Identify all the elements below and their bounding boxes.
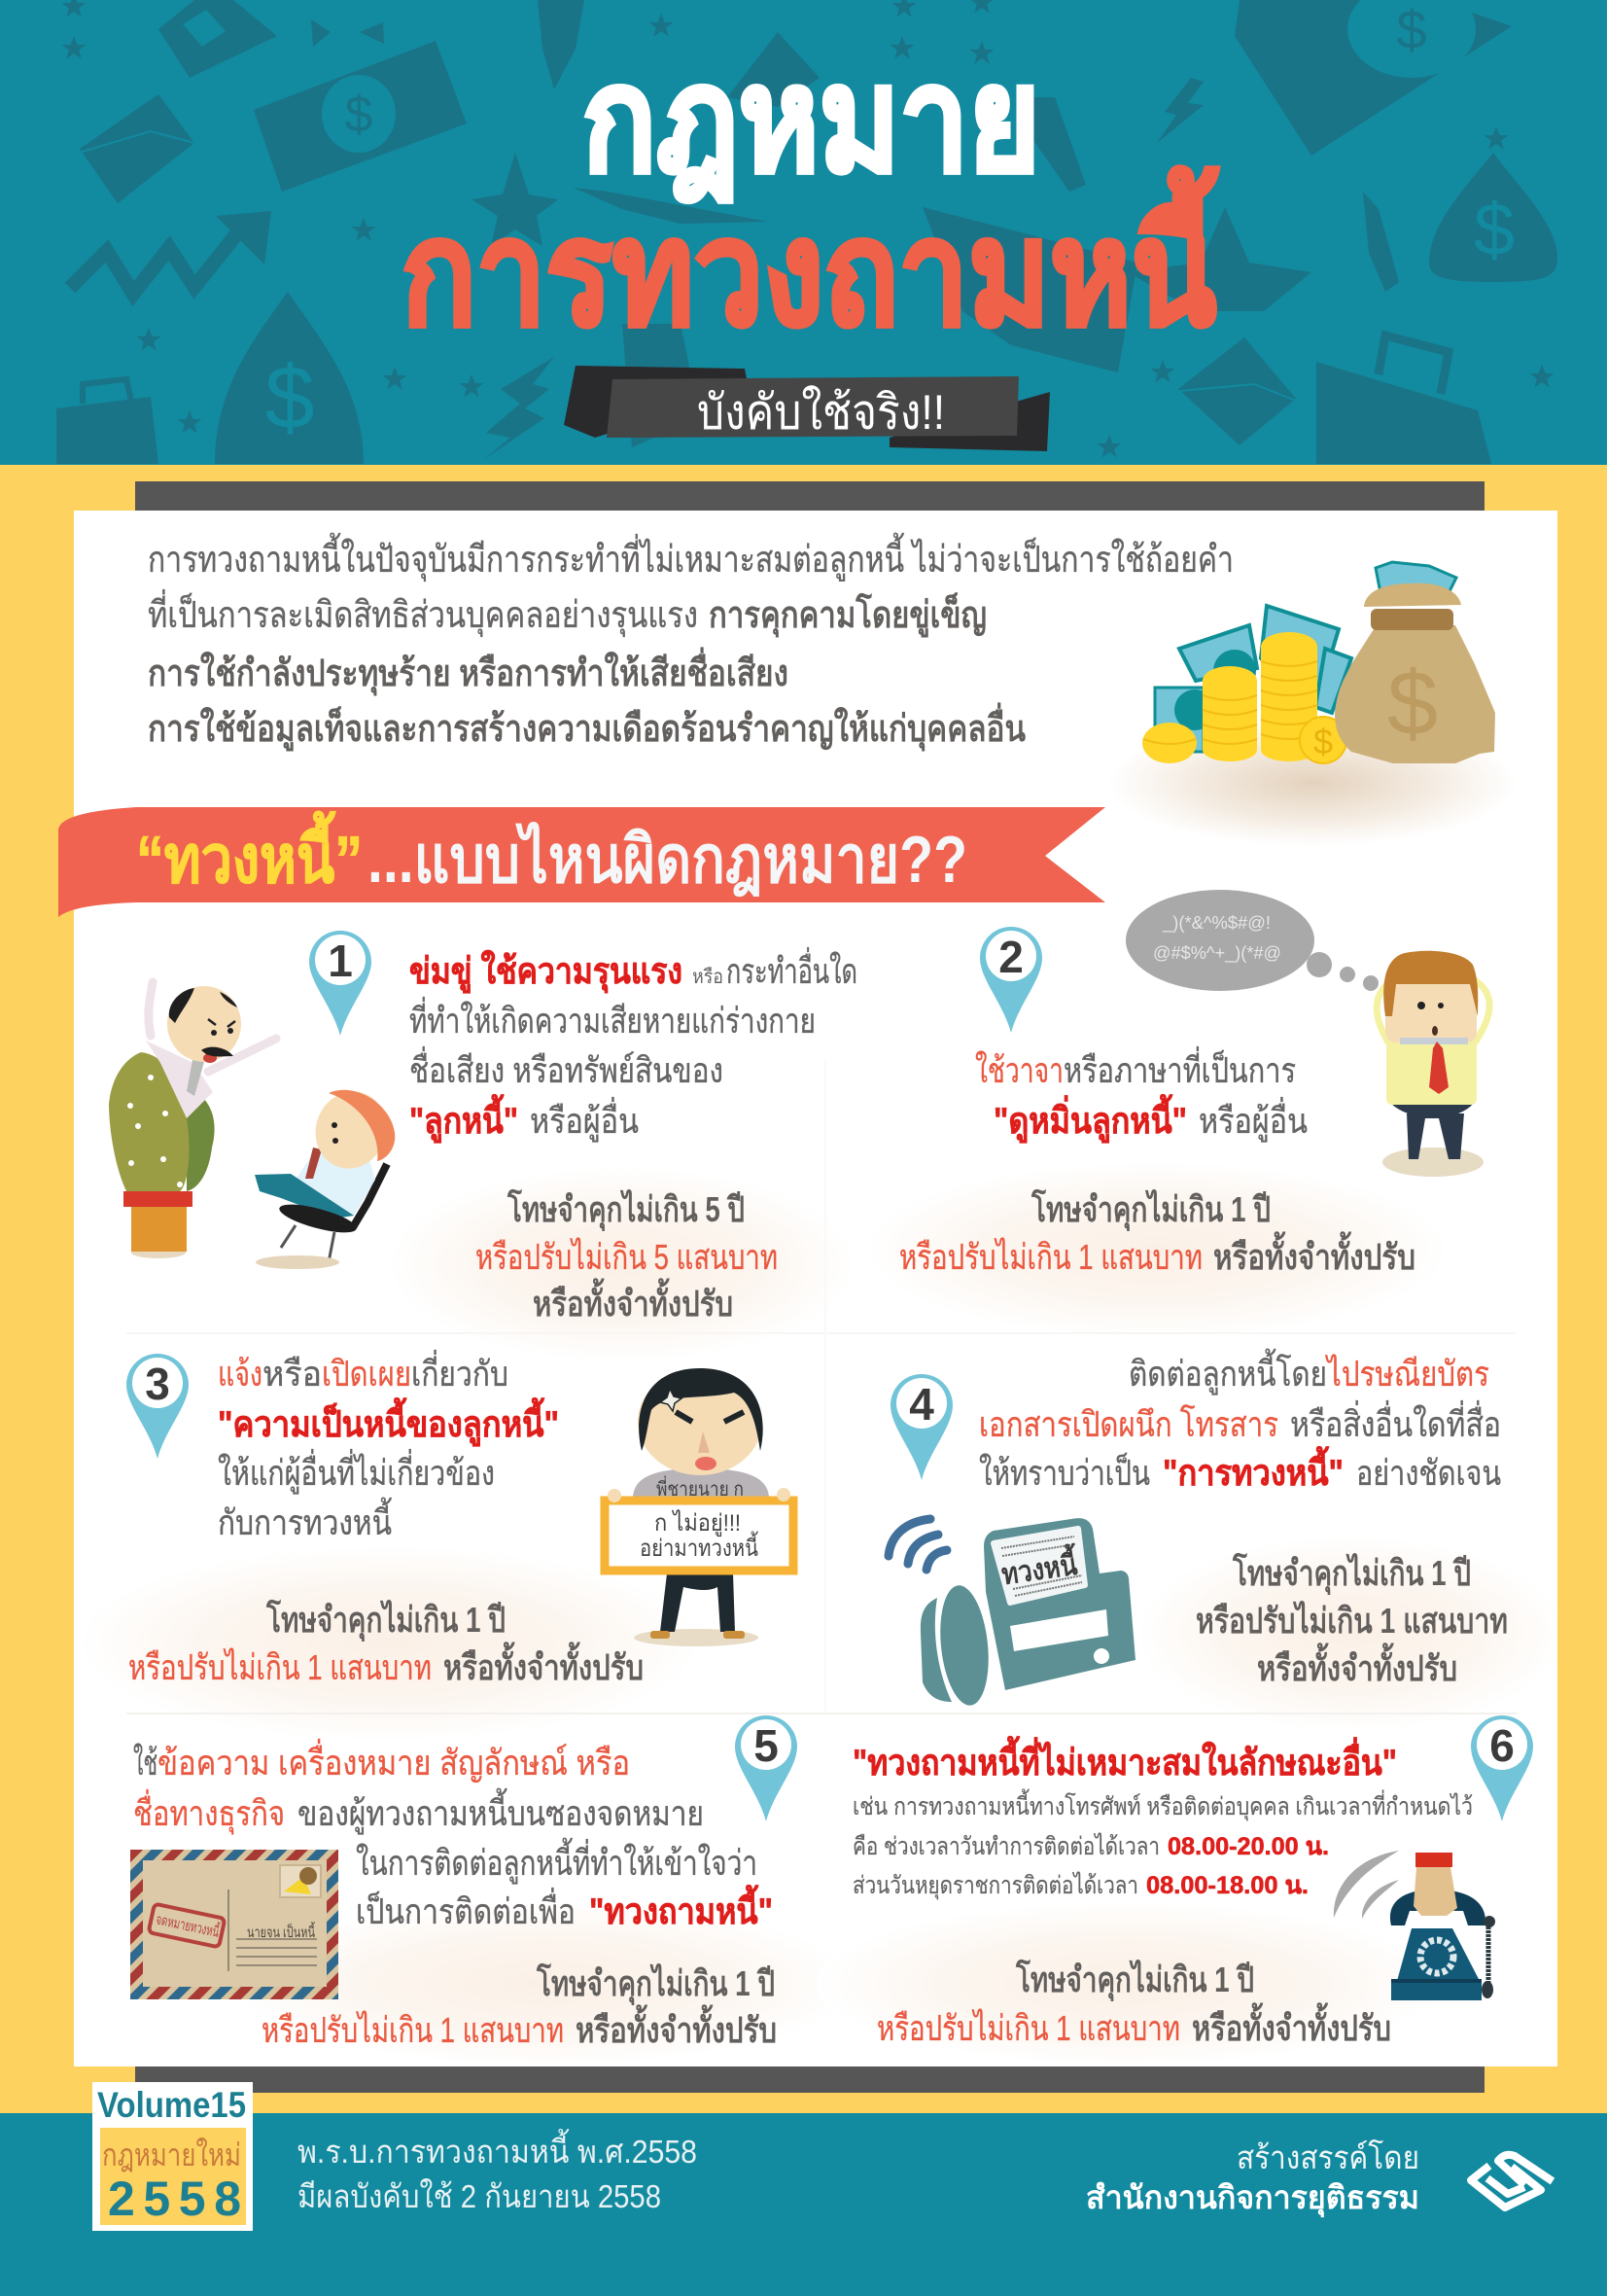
item 1 <box>109 931 857 1324</box>
pin 2 <box>980 927 1042 1033</box>
text 4: ติดต่อลูกหนี้โดย <box>1129 1348 1327 1395</box>
text 2: ใช้วาจา <box>975 1050 1064 1090</box>
text 6: คือ ช่วงเวลาวันทำการติดต่อได้เวลา <box>853 1832 1160 1860</box>
illustration: angry man with sign <box>605 1368 793 1646</box>
text 6: ส่วนวันหยุดราชการติดต่อได้เวลา <box>853 1871 1138 1900</box>
text 1: หรือ <box>692 967 723 988</box>
pin 1 <box>309 931 371 1036</box>
text 3: แจ้ง <box>218 1354 262 1394</box>
pin 3 <box>126 1354 189 1459</box>
red ribbon heading: “ทวงหนี้” <box>136 810 363 897</box>
text 4: ให้ทราบว่าเป็น <box>979 1451 1150 1493</box>
text 4 <box>979 1348 1501 1493</box>
background pattern icons: $ <box>1474 189 1515 271</box>
text 1: ที่ทำให้เกิดความเสียหายแก่ร่างกาย <box>409 997 816 1041</box>
penalty 2: หรือทั้งจำทั้งปรับ <box>1213 1231 1415 1277</box>
credit: สำนักงานกิจการยุติธรรม <box>1086 2179 1419 2218</box>
text 3: เปิดเผย <box>322 1354 411 1394</box>
item 3 <box>126 1350 793 1687</box>
pin 1: 1 <box>328 936 353 986</box>
law reference: พ.ร.บ.การทวงถามหนี้ พ.ศ.2558 <box>297 2129 697 2170</box>
penalty 5 <box>262 1962 777 2050</box>
icon: money bag with coins <box>1142 562 1495 763</box>
text 5: "ทวงถามหนี้" <box>589 1885 773 1931</box>
volume badge: Volume15 <box>97 2085 246 2125</box>
text 1: "ลูกหนี้" <box>409 1094 518 1144</box>
pin 5 <box>735 1715 797 1821</box>
icon: envelope: จดหมายทวงหนี้ <box>155 1909 222 1941</box>
background pattern icons: $ <box>345 87 373 143</box>
pin 4: 4 <box>909 1379 934 1430</box>
penalty 4 <box>1196 1552 1508 1688</box>
text 1 <box>409 947 857 1144</box>
icon: envelope <box>130 1850 338 1999</box>
text 5: ชื่อทางธุรกิจ <box>133 1789 285 1835</box>
penalty 3 <box>128 1599 644 1687</box>
volume badge: กฎหมายใหม่ <box>102 2137 241 2172</box>
pin 6 <box>1471 1715 1533 1821</box>
item 2 <box>899 890 1489 1277</box>
intro text: การทวงถามหนี้ในปัจจุบันมีการกระทำที่ไม่เหมาะสมต่อลูกหนี้ ไม่ว่าจะเป็นการใช้ถ้อยคำ <box>148 532 1234 582</box>
icon: money bag with coins: $ <box>1313 722 1333 761</box>
text 1: หรือผู้อื่น <box>530 1097 639 1143</box>
main white panel <box>58 511 1565 2066</box>
text 2: หรือภาษาที่เป็นการ <box>1064 1046 1296 1090</box>
page background: yellow <box>0 465 1607 2118</box>
law reference <box>297 2129 697 2214</box>
header band <box>0 0 1607 465</box>
credit: สร้างสรรค์โดย <box>1237 2139 1419 2175</box>
text 3: เกี่ยวกับ <box>411 1350 508 1394</box>
penalty 2: หรือปรับไม่เกิน 1 แสนบาท <box>899 1237 1203 1277</box>
illustration: angry man with sign: อย่ามาทวงหนี้ <box>640 1531 758 1562</box>
intro text: การคุกคามโดยขู่เข็ญ <box>709 592 987 638</box>
speech bubble: @#$%^+_)(*#@ <box>1153 943 1281 964</box>
text 6: 08.00-18.00 น. <box>1146 1872 1309 1899</box>
text 1: กระทำอื่นใด <box>726 947 857 991</box>
penalty 6: หรือปรับไม่เกิน 1 แสนบาท <box>877 2008 1180 2048</box>
text 5: ข้อความ เครื่องหมาย สัญลักษณ์ หรือ <box>157 1739 630 1783</box>
volume badge: 2558 <box>108 2172 241 2226</box>
text 1: ข่มขู่ ใช้ความรุนแรง <box>409 949 682 994</box>
ribbon: enforced: บังคับใช้จริง!! <box>697 385 945 440</box>
text 4: ไปรษณียบัตร <box>1325 1354 1489 1394</box>
illustration: upset man <box>1377 951 1489 1177</box>
pin 4 <box>891 1374 953 1480</box>
penalty 4: หรือทั้งจำทั้งปรับ <box>1257 1643 1457 1688</box>
text 3 <box>218 1350 559 1542</box>
text 5: เป็นการติดต่อเพื่อ <box>356 1888 576 1931</box>
text 6: เช่น การทวงถามหนี้ทางโทรศัพท์ หรือติดต่อบุคคล เกินเวลาที่กำหนดไว้ <box>853 1788 1473 1821</box>
text 5: ใช้ <box>133 1743 157 1783</box>
intro text <box>148 532 1234 752</box>
text 4: หรือสิ่งอื่นใดที่สื่อ <box>1290 1400 1501 1444</box>
pin 3: 3 <box>145 1359 170 1409</box>
penalty 2 <box>899 1188 1415 1277</box>
penalty 6 <box>877 1959 1391 2048</box>
text 2: "ดูหมิ่นลูกหนี้" <box>994 1094 1187 1144</box>
icon: fax machine <box>889 1518 1135 1708</box>
text 5: ของผู้ทวงถามหนี้บนซองจดหมาย <box>297 1787 704 1835</box>
penalty 3: โทษจำคุกไม่เกิน 1 ปี <box>265 1599 506 1643</box>
penalty 3: หรือปรับไม่เกิน 1 แสนบาท <box>128 1647 432 1687</box>
item 5 <box>130 1715 797 2050</box>
text 6: 08.00-20.00 น. <box>1168 1833 1329 1860</box>
title: debt collection: การทวงถามหนี้ <box>402 166 1218 355</box>
penalty 6: หรือทั้งจำทั้งปรับ <box>1192 2002 1391 2048</box>
icon: telephone <box>1334 1851 1495 2000</box>
intro text: การใช้ข้อมูลเท็จและการสร้างความเดือดร้อนรำคาญให้แก่บุคคลอื่น <box>148 702 1026 752</box>
text 4: เอกสารเปิดผนึก โทรสาร <box>979 1404 1278 1444</box>
icon: logo <box>1471 2155 1553 2208</box>
volume badge <box>92 2082 253 2231</box>
credit <box>1086 2139 1419 2218</box>
penalty 5: โทษจำคุกไม่เกิน 1 ปี <box>536 1962 775 2006</box>
background pattern icons <box>56 0 1557 464</box>
intro text: การใช้กำลังประทุษร้าย หรือการทำให้เสียชื่อเสียง <box>148 647 788 696</box>
text 6: "ทวงถามหนี้ที่ไม่เหมาะสมในลักษณะอื่น" <box>853 1736 1397 1783</box>
ribbon: enforced <box>564 366 1050 451</box>
text 2: หรือผู้อื่น <box>1199 1097 1308 1143</box>
text 3: "ความเป็นหนี้ของลูกหนี้" <box>218 1397 559 1447</box>
background pattern icons: $ <box>1396 0 1427 60</box>
penalty 4: หรือปรับไม่เกิน 1 แสนบาท <box>1196 1600 1508 1641</box>
background pattern icons: $ <box>264 348 315 447</box>
penalty 4: โทษจำคุกไม่เกิน 1 ปี <box>1232 1552 1471 1596</box>
penalty 5: หรือทั้งจำทั้งปรับ <box>576 2004 777 2050</box>
penalty 5: หรือปรับไม่เกิน 1 แสนบาท <box>262 2010 564 2050</box>
penalty 1 <box>475 1188 778 1324</box>
penalty 1: โทษจำคุกไม่เกิน 5 ปี <box>507 1188 745 1232</box>
footer band <box>0 2082 1607 2296</box>
illustration: angry boss and debtor <box>109 982 398 1269</box>
penalty 1: หรือปรับไม่เกิน 5 แสนบาท <box>475 1237 778 1277</box>
penalty 6: โทษจำคุกไม่เกิน 1 ปี <box>1015 1959 1254 2002</box>
icon: envelope: นายจน เป็นหนี้ <box>247 1922 315 1941</box>
item 4 <box>889 1348 1508 1708</box>
small stars <box>62 0 1554 457</box>
text 5 <box>133 1739 773 1931</box>
text 4: "การทวงหนี้" <box>1163 1446 1344 1493</box>
title: law: กฎหมาย <box>582 38 1040 202</box>
item 6 <box>853 1715 1533 2048</box>
red ribbon heading: ...แบบไหนผิดกฎหมาย?? <box>367 821 967 897</box>
law reference: มีผลบังคับใช้ 2 กันยายน 2558 <box>297 2178 661 2214</box>
penalty 3: หรือทั้งจำทั้งปรับ <box>443 1642 644 1687</box>
speech bubble <box>1126 890 1379 991</box>
text 1: ชื่อเสียง หรือทรัพย์สินของ <box>409 1046 723 1090</box>
text 3: กับการทวงหนี้ <box>218 1497 393 1542</box>
text 5: ในการติดต่อลูกหนี้ที่ทำให้เข้าใจว่า <box>356 1837 757 1885</box>
intro text: ที่เป็นการละเมิดสิทธิส่วนบุคคลอย่างรุนแรง <box>148 589 698 637</box>
top dark bar <box>135 481 1485 512</box>
text 3: หรือ <box>262 1354 322 1394</box>
penalty 2: โทษจำคุกไม่เกิน 1 ปี <box>1031 1188 1271 1232</box>
text 3: ให้แก่ผู้อื่นที่ไม่เกี่ยวข้อง <box>218 1449 495 1495</box>
speech bubble: _)(*&^%$#@! <box>1162 913 1271 934</box>
red ribbon heading <box>58 807 1105 917</box>
bottom dark bar <box>135 2066 1485 2093</box>
text 6 <box>853 1736 1473 1900</box>
text 2 <box>975 1046 1308 1144</box>
text 4: อย่างชัดเจน <box>1356 1453 1501 1493</box>
illustration: angry man with sign: ก ไม่อยู่!!! <box>654 1509 741 1537</box>
soft penalty shadings <box>78 720 1565 2066</box>
illustration: angry man with sign: พี่ชายนาย ก <box>656 1475 744 1501</box>
pin 2: 2 <box>998 932 1024 982</box>
penalty 1: หรือทั้งจำทั้งปรับ <box>533 1278 733 1324</box>
icon: fax machine: ทวงหนี้ <box>998 1542 1080 1591</box>
pin 5: 5 <box>753 1720 779 1771</box>
pin 6: 6 <box>1489 1720 1515 1771</box>
icon: money bag with coins: $ <box>1387 652 1438 754</box>
